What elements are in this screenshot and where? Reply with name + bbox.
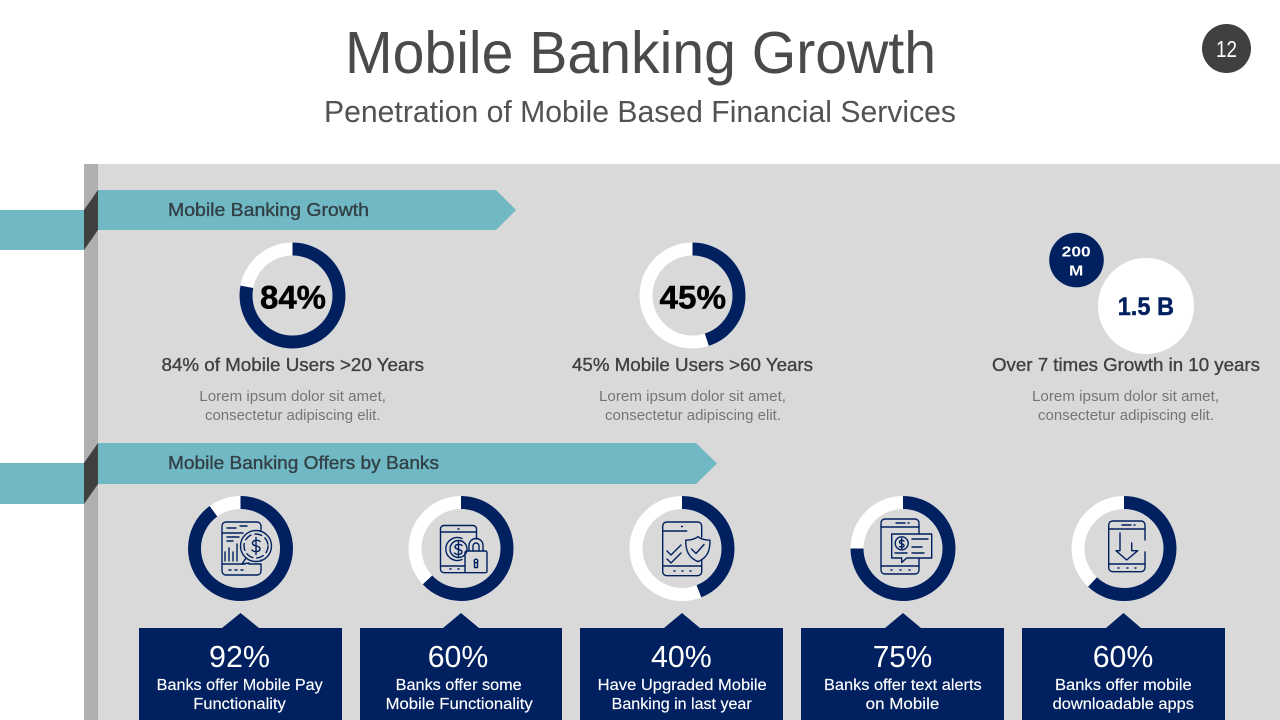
donut: 45% <box>646 249 739 342</box>
callout: 60% apps: 60% <box>1093 639 1153 674</box>
stat text: growth <box>992 355 1260 424</box>
stat text: 45% of users: consectetur adipiscing elit. <box>605 408 781 424</box>
donut: 84% <box>246 249 339 342</box>
section ribbon: Mobile Banking Offers by Banks: Mobile Banking Offers by Banks <box>168 453 439 473</box>
callout: 75%: on Mobile <box>866 696 939 713</box>
stat text: 84% of users: 84% of Mobile Users >20 Years <box>162 355 424 375</box>
donut: 75% text alerts <box>857 502 949 594</box>
donut: 60% some functionality <box>415 502 507 594</box>
icon: tablet with coin and lock <box>440 526 487 573</box>
donut: 40% upgraded <box>636 502 728 594</box>
background panel <box>84 164 1280 720</box>
stat text: 84% of users: consectetur adipiscing elit. <box>205 408 380 424</box>
donut: 84%: 84% <box>260 280 326 316</box>
section ribbon: Mobile Banking Growth: Mobile Banking Growth <box>168 200 369 220</box>
callout: 40%: Have Upgraded Mobile <box>598 677 767 694</box>
stat text: growth: consectetur adipiscing elit. <box>1038 408 1214 424</box>
icon: tablet with checks and shield <box>663 522 710 576</box>
callout: 60% apps: downloadable apps <box>1053 696 1194 713</box>
stat text: 45% of users <box>572 355 813 424</box>
growth bubbles: 200 M to 1.5 B: 200 <box>1062 244 1091 261</box>
donut: 45%: 45% <box>660 280 726 316</box>
growth bubbles: 200 M to 1.5 B: M <box>1069 263 1083 280</box>
callout: 60%: 60% <box>428 639 488 674</box>
callout: 60%: Mobile Functionality <box>386 696 533 713</box>
donut: 92% mobile pay <box>194 502 286 594</box>
page number badge: 12 <box>1216 36 1237 62</box>
callout: 40%: Banking in last year <box>612 696 752 713</box>
subtitle: Penetration of Mobile Based Financial Services <box>324 94 956 129</box>
donut: 60% downloadable apps <box>1078 502 1170 594</box>
callout: 75%: Banks offer text alerts <box>824 677 982 694</box>
icon: phone with payment message <box>881 519 932 574</box>
stat text: 45% of users: 45% Mobile Users >60 Years <box>572 355 813 375</box>
section ribbon: Mobile Banking Offers by Banks <box>0 443 717 504</box>
callout: 92%: Functionality <box>193 696 286 713</box>
callout: 40%: 40% <box>651 639 712 674</box>
stat text: growth: Lorem ipsum dolor sit amet, <box>1032 389 1219 405</box>
icon: phone with dollar coin <box>222 522 272 575</box>
stat text: 45% of users: Lorem ipsum dolor sit amet, <box>599 389 786 405</box>
callout: 75%: 75% <box>873 639 932 674</box>
callout: 92%: 92% <box>209 639 270 674</box>
title: Mobile Banking Growth <box>345 20 936 86</box>
callout: 60% <box>360 613 562 720</box>
icon: phone with download arrow <box>1109 521 1145 572</box>
stat text: 84% of users <box>162 355 424 424</box>
callout: 92% <box>139 613 342 720</box>
stat text: growth: Over 7 times Growth in 10 years <box>992 355 1260 375</box>
callout: 40% <box>580 613 783 720</box>
callout: 60% apps <box>1022 613 1225 720</box>
growth bubbles: 200 M to 1.5 B <box>1049 233 1194 354</box>
stat text: 84% of users: Lorem ipsum dolor sit amet, <box>199 389 386 405</box>
side strip <box>84 164 98 720</box>
growth bubbles: 200 M to 1.5 B: 1.5 B <box>1118 293 1174 321</box>
callout: 60% apps: Banks offer mobile <box>1055 677 1192 694</box>
callout: 75% <box>801 613 1004 720</box>
callout: 60%: Banks offer some <box>396 677 522 694</box>
section ribbon: Mobile Banking Growth <box>0 190 516 250</box>
callout: 92%: Banks offer Mobile Pay <box>157 677 323 694</box>
page number badge <box>1202 24 1251 73</box>
